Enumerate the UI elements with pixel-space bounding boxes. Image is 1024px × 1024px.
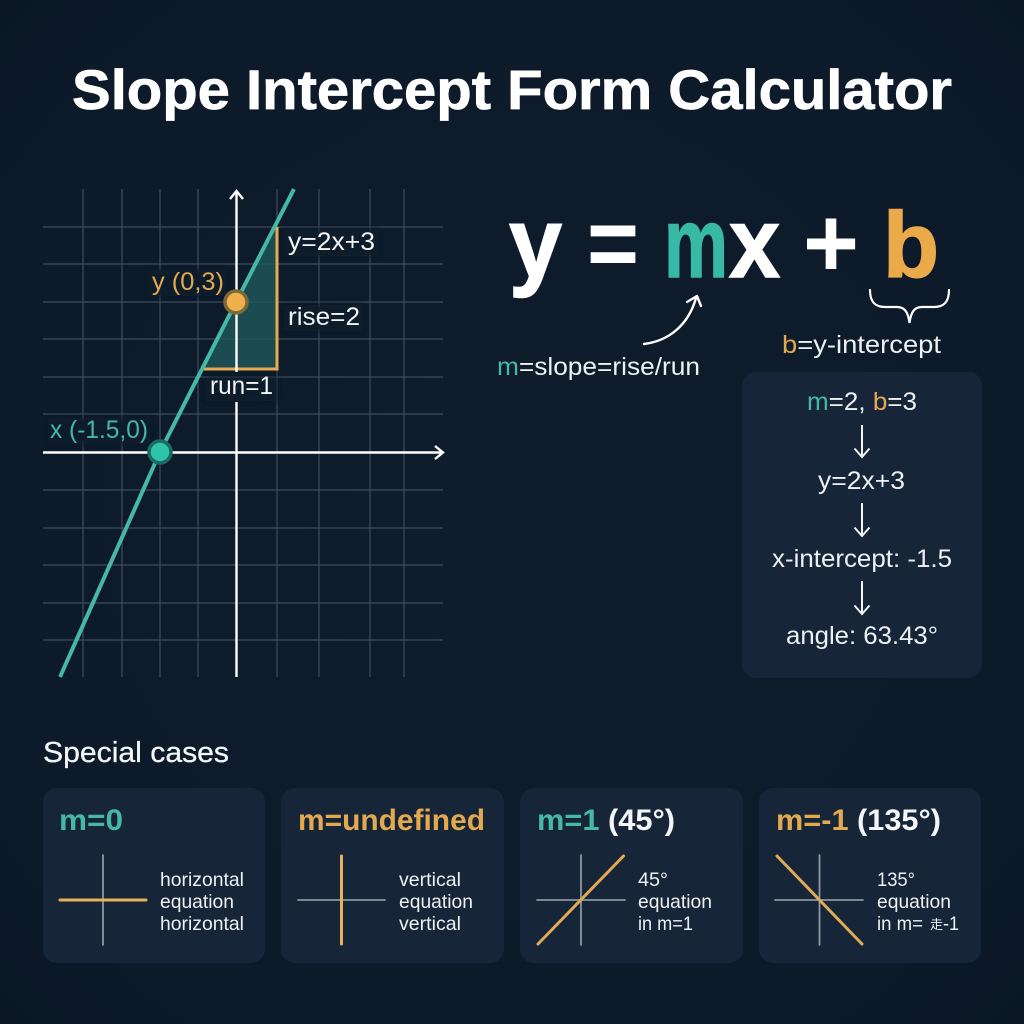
panel: m=undefined — [281, 788, 504, 963]
description — [877, 869, 959, 935]
icon: vertical line — [298, 856, 385, 944]
formula: x — [729, 187, 780, 298]
description — [399, 869, 473, 935]
y-intercept point — [225, 291, 247, 313]
panel: m=1: m=1 (45°) — [537, 804, 675, 837]
label: y intercept: y (0,3) — [152, 268, 224, 296]
step: x-intercept: x-intercept: -1.5 — [772, 545, 952, 573]
x-intercept point — [149, 441, 171, 463]
label: rise: rise=2 — [288, 303, 360, 331]
label: equation: y=2x+3 — [288, 228, 375, 256]
description — [160, 869, 244, 935]
line y=2x+3 — [60, 189, 294, 677]
description: 135° — [877, 869, 915, 891]
icon: falling diagonal — [775, 855, 863, 945]
y axis — [230, 191, 243, 677]
label: intercept definition: b=y-intercept — [782, 331, 941, 359]
description — [638, 869, 712, 935]
label: slope definition: m=slope=rise/run — [497, 353, 700, 381]
step: values: m=2, b=3 — [807, 388, 917, 416]
description: equation — [160, 891, 234, 913]
panel: m=1 — [520, 788, 743, 963]
description: -1 — [943, 913, 959, 935]
label: run: run=1 — [210, 372, 273, 400]
panel: worked example — [742, 372, 982, 678]
x axis — [43, 446, 443, 459]
description: equation — [638, 891, 712, 913]
formula: = — [587, 187, 639, 298]
arrow: slope annotation — [644, 296, 701, 344]
description: equation — [877, 891, 951, 913]
description: 45° — [638, 869, 668, 891]
icon: rising diagonal — [537, 855, 625, 945]
panel: m=-1: m=-1 (135°) — [776, 804, 941, 837]
panel: m=0: m=0 — [59, 804, 123, 837]
icon: horizontal line — [60, 855, 146, 945]
heading: special cases: Special cases — [43, 737, 229, 769]
brace: y-intercept annotation — [870, 290, 949, 323]
panel: m=undefined: m=undefined — [298, 804, 485, 837]
formula: y — [509, 187, 562, 298]
formula: + — [803, 187, 859, 298]
description: in m=1 — [638, 913, 693, 935]
step: equation: y=2x+3 — [818, 467, 905, 495]
arrow down — [854, 581, 870, 614]
grid — [43, 189, 443, 677]
arrow down — [854, 503, 870, 536]
panel: m=0 — [43, 788, 265, 963]
formula — [509, 187, 939, 298]
description: equation — [399, 891, 473, 913]
arrow down — [854, 425, 870, 457]
step: angle: angle: 63.43° — [786, 622, 938, 650]
description: horizontal — [160, 913, 244, 935]
description: in m= — [877, 913, 923, 935]
description: vertical — [399, 869, 461, 891]
description: vertical — [399, 913, 461, 935]
description: 走 — [930, 917, 943, 932]
label masks — [48, 230, 378, 444]
description: horizontal — [160, 869, 244, 891]
panel: m=-1 — [759, 788, 981, 963]
label: x intercept: x (-1.5,0) — [50, 416, 148, 444]
formula: m — [664, 187, 728, 298]
formula: b — [883, 193, 939, 297]
chart: slope intercept graph — [43, 189, 443, 677]
rise and run triangle — [203, 227, 277, 369]
title: Slope Intercept Form Calculator — [72, 58, 952, 121]
